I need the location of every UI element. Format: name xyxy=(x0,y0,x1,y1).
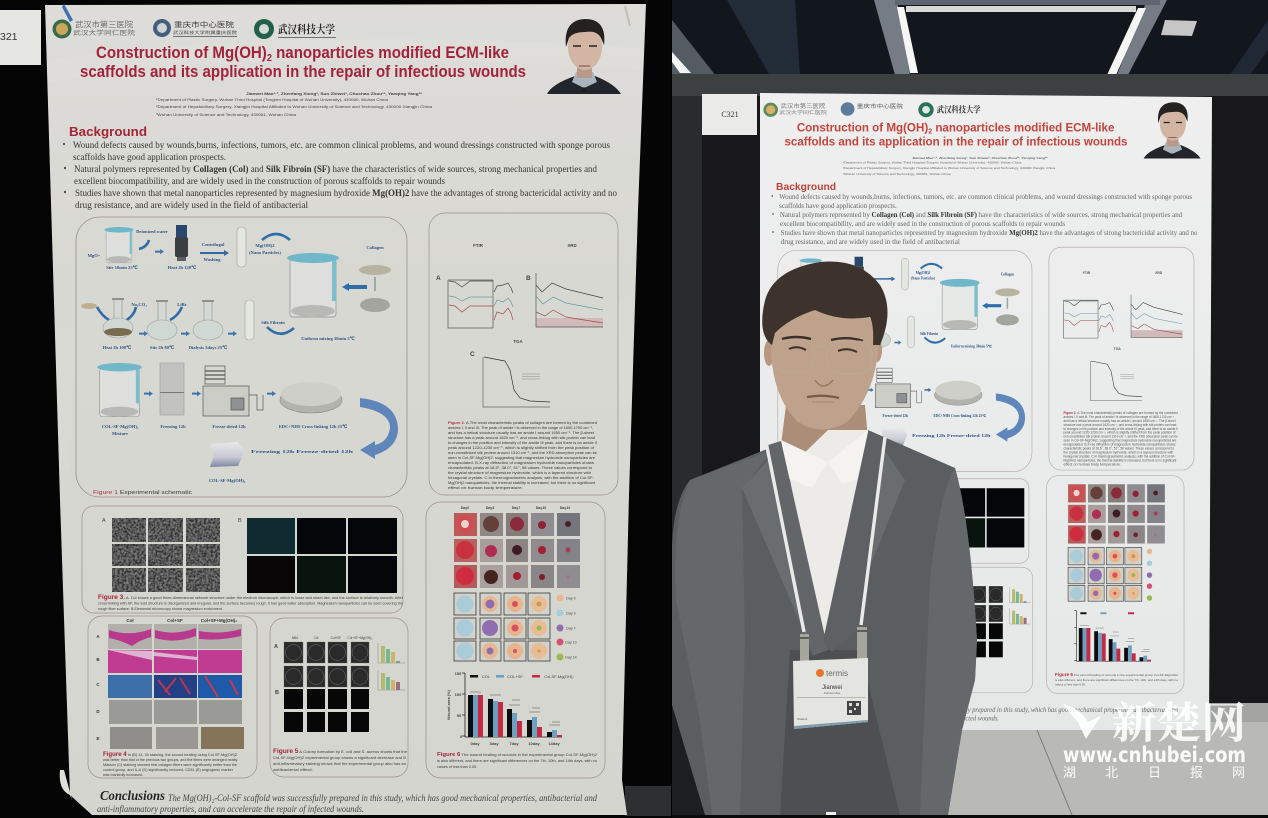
caption: figure 6: Figure 6 The wound healing of wounds in the experimental group Col-SF-Mg(OH)2 xyxy=(437,752,597,758)
schematic labels: Centrifugal xyxy=(202,242,225,247)
panel: figure 4 histology xyxy=(88,616,257,778)
title xyxy=(785,121,1128,149)
bullet list: Wound defects caused by wounds,burns, infections, tumors, etc. are common clinical problems, and wound dressings constructed with sponge porous xyxy=(73,140,610,151)
left photo: black backdrop xyxy=(0,0,671,818)
logos: 武汉科技大学 xyxy=(937,105,981,115)
figure labels: TGA xyxy=(1114,347,1121,351)
bullet list: excellent biocompatibility, and are widely used in the construction of porous scaffolds to repair wounds xyxy=(74,176,445,187)
row C: Masson xyxy=(108,675,242,698)
icon: collagen sponge and fibres xyxy=(359,265,391,312)
column and row labels: Col+SF+Mg(OH)₂ xyxy=(201,618,237,623)
caption: figure 4: Masson (C) staining showed that collagen fibers were significantly better than the xyxy=(103,763,237,767)
caption: figure 6: is also different, and there are significant differences on the 7th, 10th, and 14th days, with no xyxy=(1055,678,1178,682)
logo: Wuhan Third Hospital: 武汉大学同仁医院 xyxy=(73,29,135,37)
floor strip beside left poster xyxy=(625,786,671,816)
icon: silk cocoon xyxy=(81,303,97,309)
schematic labels: Dialysis 3days 25℃ xyxy=(189,344,228,350)
column titles and chart labels: 7day xyxy=(509,741,519,746)
watermark calligraphy: 新楚网 xyxy=(1112,700,1246,748)
caption: figure 2 xyxy=(448,420,598,490)
icon: large beaker xyxy=(287,253,339,317)
icon: freezer xyxy=(160,363,184,415)
schematic labels: Freeze-dried 12h xyxy=(212,424,246,429)
badge clips xyxy=(800,627,867,663)
column titles and chart labels: Col-SF-Mg(OH)₂ xyxy=(544,674,574,679)
icon: scaffold dish xyxy=(280,382,342,413)
caption: figure 2: encapsulated. B.X-ray diffraction of magnesium hydroxide nanoparticles shows xyxy=(448,460,594,465)
pins on poster corners xyxy=(62,4,630,26)
title: scaffolds and its application in the repair of infectious wounds xyxy=(785,135,1128,149)
caption: figure 1: Figure 1 Experimental schematic xyxy=(93,490,193,496)
column titles and chart labels: Day 3 xyxy=(566,612,576,616)
schematic labels: Na₂CO₃ xyxy=(131,302,147,307)
figure labels xyxy=(883,271,1163,438)
caption: figure 6: is also different, and there are significant differences on the 7th, 10th, and 14th days, with no xyxy=(437,759,597,763)
caption: figure 2: Figure 2. A.The most characteristic peaks of collagen are formed by the combined xyxy=(1063,411,1178,415)
labels: Col+SF+Mg(OH)₂ xyxy=(347,636,373,640)
authors: ¹Department of Plastic Surgery, Wuhan Third Hospital (Tongren Hospital of Wuhan University), 430060, Wuhan China xyxy=(843,161,1022,165)
heading: Background: Background xyxy=(69,124,147,139)
schematic labels: Deionized water xyxy=(136,229,168,234)
column titles and chart labels: 0 xyxy=(460,734,463,739)
badge logo: termis xyxy=(826,669,848,678)
caption: figure 2: characteristic peaks at 18.5°, 38.0°, 51°, 58 values. These values correspond to xyxy=(1063,446,1174,451)
bullet list: scaffolds have good application prospects. xyxy=(779,202,897,210)
right photo: poster board xyxy=(672,74,1268,756)
caption: figure 2: hexagonal crystals. C.In thermogravimetric analysis, with the addition of Col-SF- xyxy=(1063,454,1176,458)
column titles and chart labels: Wound area (%) xyxy=(446,689,451,720)
chart titles xyxy=(436,243,577,358)
watermark subtitle: 日 xyxy=(1148,765,1161,780)
column titles and chart labels: Day14 xyxy=(560,506,570,510)
figure 4 images xyxy=(802,572,907,671)
figure labels: Freeze-dried 12h xyxy=(883,414,908,418)
plate grid: staining xyxy=(284,689,369,732)
caption: figure 3: Figure 3. A. Col shows a good three-dimensional network structure under the electron microscope, which is loose and sheet-like, and the surface is relatively smooth. After xyxy=(98,595,404,601)
panel: figure 5 antibacterial xyxy=(270,618,408,777)
caption: figure 5 xyxy=(273,749,407,772)
bullet list xyxy=(771,193,1198,246)
column titles and chart labels: Day3 xyxy=(486,506,494,510)
chart titles: XRD xyxy=(567,243,577,248)
title: Construction of Mg(OH) xyxy=(797,121,940,134)
column titles and chart labels: 10day xyxy=(528,741,540,746)
chart titles: TGA xyxy=(513,339,523,344)
schematic labels: Heat 2h 100℃ xyxy=(103,344,132,350)
chart: FTIR xyxy=(448,280,513,328)
schematic labels: Silk Fibroin xyxy=(261,320,285,325)
name badge xyxy=(793,658,868,729)
logo: Chongqing Central Hospital: 武汉科技大学附属重庆医院 xyxy=(173,29,237,35)
arrow: large curved xyxy=(360,398,398,459)
right photo: ceiling xyxy=(672,0,1268,76)
figure labels: Uniform mixing 30min 5℃ xyxy=(951,344,993,349)
icon: mixture beaker xyxy=(97,363,142,417)
title: nanoparticles modified ECM-like xyxy=(272,44,509,62)
watermark subtitle: 报 xyxy=(1190,765,1203,780)
conclusions: Conclusions xyxy=(100,789,165,804)
logos: 武汉市第三医院 xyxy=(781,102,826,110)
caption: figure 2: structure has a peak around 1620 cm⁻¹, and cross-linking with silk protein can lead xyxy=(448,435,595,440)
column and row labels: B xyxy=(96,657,100,662)
schematic labels: Washing xyxy=(203,257,221,262)
logo: Chongqing Central Hospital: 重庆市中心医院 xyxy=(174,20,234,29)
hair xyxy=(762,261,888,345)
caption: figure 2: Mg(OH)2 nanoparticles, the thermal stability is increased, but there is no significant xyxy=(1063,458,1176,462)
caption: figure 4: was better than that of the previous two groups, and the fibers were arranged neatly. xyxy=(103,758,238,762)
labels: A xyxy=(274,644,278,650)
watermark subtitle: 网 xyxy=(1232,765,1245,780)
caption: figure 5: anti-inflammatory staining shows that the experimental group also has an xyxy=(273,762,406,766)
bullet list: Studies have shown that metal nanoparticles represented by magnesium hydroxide Mg(OH)2 have the advantages of strong bactericidal activity and no xyxy=(75,188,617,199)
authors and affiliations: Jianwei Mao¹·², Zhenfang Xiong¹, Sun Zhiwei³, Chuchao Zhou¹*, Yanqing Yang¹* xyxy=(246,91,423,96)
bullet list: drug resistance, and are widely used in the field of antibacterial xyxy=(75,200,308,211)
bullet list: Wound defects caused by wounds,burns, infections, tumors, etc. are common clinical problems, and wound dressings constructed with sponge porous xyxy=(779,193,1192,201)
figure labels: FTIR xyxy=(1083,271,1091,275)
bar charts xyxy=(378,643,405,690)
caption: figure 2: effect on human body temperature. xyxy=(1063,462,1121,466)
panel: figure 3 microscopy xyxy=(82,506,404,613)
eyebrows and eyes xyxy=(782,337,863,352)
column titles and chart labels: Day7 xyxy=(512,506,520,510)
schematic labels: LiBr xyxy=(177,302,187,307)
image grid: SEM xyxy=(112,518,220,592)
poster header: logos, title, authors xyxy=(52,19,526,117)
labels xyxy=(274,636,373,696)
column and row labels: D xyxy=(96,709,100,714)
schematic labels: Stir 10min 25℃ xyxy=(106,264,139,270)
schematic labels: COL-SF-Mg(OH)₂ xyxy=(209,478,246,483)
booth number card on board xyxy=(702,94,757,135)
row D: IHC xyxy=(109,700,242,724)
chart titles: A xyxy=(436,275,441,282)
column titles and chart labels: Day 0 xyxy=(566,596,576,600)
conclusions xyxy=(794,705,1178,723)
figure labels: Collagen xyxy=(1001,273,1014,277)
caption: figure 2: structure has a peak around 1620 cm⁻¹, and cross-linking with silk protein can lead xyxy=(1063,423,1177,427)
wound photos xyxy=(454,513,580,588)
caption: figure 4 xyxy=(103,752,238,777)
icon: freeze dryer xyxy=(203,366,263,416)
icon: autoclave xyxy=(175,225,188,261)
panel: figure 2 characterization xyxy=(429,213,618,495)
conclusions: anti-inflammatory properties, and can accelerate the repair of infected wounds. xyxy=(794,713,999,723)
figure 1 artwork xyxy=(782,257,1025,448)
panel letters xyxy=(102,518,242,524)
booth number card on board: C321 xyxy=(721,110,739,119)
logo: Wuhan University of Science and Technology xyxy=(254,19,336,39)
column titles and chart labels: Day 10 xyxy=(565,640,577,644)
column titles and chart labels: 3day xyxy=(489,741,499,746)
caption: figure 2: hexagonal crystals. C.In thermogravimetric analysis, with the addition of Col-SF- xyxy=(448,475,595,480)
plate grid: colony plates xyxy=(284,642,369,687)
wound trace squares xyxy=(454,593,550,661)
authors and affiliations: ²Department of Hepatobiliary Surgery, Xiangjin Hospital Affiliated to Wuhan University of Science and Technology, 430000 Xiangjin China xyxy=(156,105,433,109)
ears xyxy=(764,338,882,366)
figure labels: EDC+NHS Cross-linking 12h 25℃ xyxy=(933,413,987,418)
column titles and chart labels: Day 7 xyxy=(566,626,576,630)
panel: figure 1 experimental schematic xyxy=(76,217,407,497)
title: nanoparticles modified ECM-like xyxy=(932,121,1114,134)
cuff xyxy=(826,812,836,815)
schematic labels: Stir 2h 80℃ xyxy=(150,344,175,350)
caption: figure 2: non-crosslinked silk protein around 1310 cm⁻¹, and the XRD absorption peak can be xyxy=(448,450,598,455)
caption: figure 2: peak around 1220-1230 cm⁻¹, which is slightly shifted from the peak position of xyxy=(1063,431,1176,435)
column and row labels: C xyxy=(96,682,100,687)
background heading and bullets xyxy=(63,124,617,211)
caption: figure 2 xyxy=(1063,411,1178,466)
column titles and chart labels: 150 xyxy=(455,671,462,676)
caption: figure 6: Figure 6 The wound healing of wounds in the experimental group Col-SF-Mg(OH)2 xyxy=(1055,672,1178,677)
booth number card xyxy=(0,10,41,65)
authors xyxy=(843,156,1056,176)
column and row labels xyxy=(96,618,237,741)
icon: test tubes xyxy=(237,227,254,340)
schematic labels: EDC+NHS Cross-linking 12h 25℃ xyxy=(279,423,348,429)
booth number card: 321 xyxy=(0,31,18,43)
labels: Col+SF xyxy=(331,636,341,640)
authors: ²Department of Hepatobiliary Surgery, Xiangjin Hospital Affiliated to Wuhan University of Science and Technology, 430000 Xiangjin China xyxy=(843,166,1056,170)
glasses xyxy=(773,340,872,374)
schematic labels xyxy=(88,229,384,483)
authors: ³Wuhan University of Science and Technology, 430081, Wuhan China xyxy=(843,172,951,176)
icon: small beaker xyxy=(104,227,134,263)
caption: figure 2: seen in Col-SF-Mg(OH)2, suggesting that magnesium hydroxide nanoparticles are xyxy=(1063,439,1177,443)
caption: figure 6: values of less than 0.05. xyxy=(1055,683,1086,687)
right poster figures xyxy=(778,247,1194,723)
portrait xyxy=(1144,102,1201,158)
schematic labels: Collagen xyxy=(366,245,384,250)
name badge: Student xyxy=(797,717,808,721)
figure 2 charts xyxy=(1063,295,1183,401)
panel: figure 6 wound healing xyxy=(426,502,605,778)
heading: Background: Background xyxy=(776,182,836,193)
authors and affiliations xyxy=(156,91,433,117)
shirt and collar xyxy=(781,430,873,650)
caption: figure 3: rough fiber surface. B.Elemental microscopy shows magnesium enrichment. xyxy=(98,607,223,611)
nose and mouth xyxy=(807,380,839,402)
column and row labels: A xyxy=(96,634,100,639)
icon: process arrows xyxy=(139,249,375,396)
figure 5 images xyxy=(938,586,1030,657)
column titles and chart labels: Day10 xyxy=(536,506,546,510)
column titles and chart labels: 50 xyxy=(457,713,462,718)
logo: Wuhan Third Hospital: 武汉市第三医院 xyxy=(75,19,134,29)
caption: figure 4: was markedly increased. xyxy=(103,773,143,777)
row A: HE overview xyxy=(108,624,242,649)
authors: Jianwei Mao¹·², Zhenfang Xiong¹, Sun Zhiwei³, Chuchao Zhou¹*, Yanqing Yang¹* xyxy=(912,156,1049,160)
schematic labels: Heat 2h 120℃ xyxy=(168,264,197,270)
authors and affiliations: ³Wuhan University of Science and Technology, 430081, Wuhan China xyxy=(156,113,297,117)
bullet list xyxy=(63,140,617,211)
watermark subtitle xyxy=(1063,765,1245,780)
figure labels: Mg(OH)2 xyxy=(916,271,930,275)
bullet list: scaffolds have good application prospects. xyxy=(73,152,226,163)
bullet list: Natural polymers represented by Collagen (Col) and Silk Fibroin (SF) have the characteristics of wide sources, strong mechanical properties and xyxy=(74,164,597,175)
caption: figure 2: effect on human body temperature. xyxy=(448,485,523,490)
logo: Wuhan University of Science and Technology: 武汉科技大学 xyxy=(278,22,335,36)
person in suit with lanyard badge xyxy=(672,261,977,815)
column and row labels: Col xyxy=(126,618,134,623)
caption: figure 2: encapsulated. B.X-ray diffraction of magnesium hydroxide nanoparticles shows xyxy=(1063,443,1176,447)
bullet list: drug resistance, and are widely used in the field of antibacterial xyxy=(781,238,960,246)
caption: figure 2: characteristic peaks at 18.5°, 38.0°, 51°, 58 values. These values correspond to xyxy=(448,465,593,470)
lapels xyxy=(742,444,905,650)
watermark: cnhubei logo xyxy=(1063,700,1246,780)
row B: HE detail xyxy=(108,650,242,673)
chart titles: FTIR xyxy=(473,243,484,248)
caption: figure 6 xyxy=(437,752,597,769)
caption: figure 2: seen in Col-SF-Mg(OH)2, suggesting that magnesium hydroxide nanoparticles are xyxy=(448,455,596,460)
panel letters: A xyxy=(102,518,106,524)
conclusions: The Mg(OH)₂-Col-SF scaffold was successfully prepared in this study, which has good mechanical properties, antibacterial and xyxy=(168,793,597,804)
column titles and chart labels: 100 xyxy=(455,692,462,697)
row E: IHC xyxy=(110,727,244,749)
figure 6 images and chart xyxy=(1068,484,1165,661)
logo: Wuhan Third Hospital xyxy=(52,19,135,38)
icon: bird xyxy=(1063,704,1101,739)
conclusions: anti-inflammatory properties, and can accelerate the repair of infected wounds. xyxy=(97,804,364,815)
schematic labels: Freezing 12h xyxy=(160,424,186,429)
column titles and chart labels: 0day xyxy=(470,741,480,746)
column titles and chart labels: 14day xyxy=(548,741,560,746)
jacket xyxy=(672,430,977,815)
column titles and chart labels: COL xyxy=(482,674,491,679)
caption: figure 6 xyxy=(1055,672,1178,687)
icon: curved arrows xyxy=(97,234,294,334)
figure 3 images xyxy=(805,488,1024,547)
caption: figure 2: the crystal structure of magnesium hydroxide, which is a layered structure with xyxy=(448,470,591,475)
logo: Chongqing Central Hospital xyxy=(153,19,237,37)
right poster header xyxy=(763,102,1201,246)
column titles and chart labels: Day0 xyxy=(461,506,469,510)
title: Construction of Mg(OH) xyxy=(96,44,283,62)
caption: figure 2: and has a helical structure usually has an amide I around 1650 cm⁻¹. The β-sheet xyxy=(448,430,595,435)
caption: figure 2: the crystal structure of magnesium hydroxide, which is a layered structure with xyxy=(1063,450,1174,454)
watermark subtitle: 北 xyxy=(1105,765,1118,780)
column and row labels: E xyxy=(96,736,100,741)
figure labels: XRD xyxy=(1155,271,1163,275)
left poster sheet xyxy=(45,4,646,815)
schematic labels: Mixture xyxy=(112,431,128,436)
panel outlines xyxy=(778,247,1194,694)
caption: figure 2: amides I, II and III. The peak of amide I is observed in the range of 1600-1700 cm⁻¹, xyxy=(1063,415,1175,419)
schematic labels: Uniform mixing 30min 5℃ xyxy=(301,335,356,341)
chart titles: C xyxy=(470,351,475,358)
caption: figure 4: control group, and IL-6 (D) significantly reduced; CD31 (E) angiogenic marker xyxy=(103,768,234,772)
panel letters: B xyxy=(238,518,242,524)
caption: figure 3 xyxy=(98,595,404,611)
column and row labels: Col+SF xyxy=(167,618,183,623)
watermark subtitle: 湖 xyxy=(1063,765,1076,780)
caption: figure 5: Figure 5 A.Colony formation by E. coli and S. aureus shows that the xyxy=(273,749,407,755)
bullet list: Studies have shown that metal nanoparticles represented by magnesium hydroxide Mg(OH)2 have the advantages of strong bactericidal activity and no xyxy=(781,229,1198,237)
caption: figure 2: to changes in the position and intensity of the amide III peak, and there is an amide II xyxy=(448,440,597,445)
portrait photo in poster header xyxy=(547,19,621,94)
caption: figure 3: cross-linking with SF, the void structure is disorganized and irregular, and the surface becomes rough. It has good water absorption. Magnesium nanoparticles can be seen covering the xyxy=(98,602,403,606)
figure labels: Freezing 12h Freeze-dried 12h xyxy=(912,434,991,438)
schematic labels: Freezing 12h Freeze-dried 12h xyxy=(251,449,354,454)
bullet list: excellent biocompatibility, and are widely used in the construction of porous scaffolds to repair wounds xyxy=(780,220,1065,228)
chart: XRD xyxy=(536,273,603,327)
caption: figure 2: to changes in the position and intensity of the amide III peak, and there is an amide II xyxy=(1063,427,1178,431)
authors and affiliations: ¹Department of Plastic Surgery, Wuhan Third Hospital (Tongren Hospital of Wuhan University), 430060, Wuhan China xyxy=(156,98,389,102)
neck xyxy=(781,405,868,480)
chart: TGA xyxy=(483,357,550,407)
column titles and chart labels: Day 14 xyxy=(565,656,577,660)
caption: figure 2: Figure 2. A.The most characteristic peaks of collagen are formed by the combined xyxy=(448,420,597,425)
image grid: elemental mapping xyxy=(247,518,397,593)
column titles and chart labels: COL+SF xyxy=(507,674,523,679)
figure labels: Silk Fibroin xyxy=(920,332,938,336)
labels: NBA xyxy=(292,636,299,640)
caption: figure 5: antibacterial effect. xyxy=(273,768,313,772)
legend dots xyxy=(556,594,564,660)
bullet list: Natural polymers represented by Collagen (Col) and Silk Fibroin (SF) have the characteristics of wide sources, strong mechanical properties and xyxy=(780,211,1182,219)
icon: flasks xyxy=(103,298,223,340)
title: 2 xyxy=(928,127,932,136)
bar chart: wound area xyxy=(462,673,562,737)
logos: 武汉大学同仁医院 xyxy=(779,109,827,116)
caption: figure 2: Mg(OH)2 nanoparticles, the thermal stability is increased, but there is no significant xyxy=(448,480,596,485)
face xyxy=(771,302,879,430)
caption: figure 6: values of less than 0.05. xyxy=(437,765,477,769)
caption: figure 2: peak around 1220-1230 cm⁻¹, which is slightly shifted from the peak position of xyxy=(448,445,595,450)
caption: figure 2: non-crosslinked silk protein around 1310 cm⁻¹, and the XRD absorption peak can be xyxy=(1063,435,1178,439)
labels: Col xyxy=(314,636,319,640)
title: 2 xyxy=(267,53,272,64)
caption: figure 2: amides I, II and III. The peak of amide I is observed in the range of 1600-1700 cm⁻¹, xyxy=(448,425,593,430)
conclusions xyxy=(97,789,597,815)
floor xyxy=(672,700,1268,818)
logos: 重庆市中心医院 xyxy=(857,102,904,110)
schematic labels: (Nano Particles) xyxy=(249,250,281,255)
name badge: Jianwei Mao xyxy=(824,691,841,695)
caption: figure 2: and has a helical structure usually has an amide I around 1650 cm⁻¹. The β-sheet xyxy=(1063,419,1176,423)
column titles and chart labels xyxy=(446,506,577,746)
title: scaffolds and its application in the repair of infectious wounds xyxy=(80,63,526,81)
logos xyxy=(763,102,981,117)
lanyard straps xyxy=(766,432,885,656)
schematic labels: COL-SF-Mg(OH)₂ xyxy=(102,424,139,429)
conclusions: The Mg(OH)₂-Col-SF scaffold was successfully prepared in this study, which has good mechanical properties, antibacterial and xyxy=(848,705,1178,714)
icon: final sponge xyxy=(210,442,245,467)
schematic labels: Mg(OH)2 xyxy=(255,243,275,248)
caption: figure 5: Col-SF-Mg(OH)2 experimental group shows a significant decrease and B xyxy=(273,756,406,760)
caption: figure 4: Figure 4 In (B) 14, 3h staining, the wound healing using Col-SF-Mg(OH)2 xyxy=(103,752,237,758)
right poster sheet xyxy=(760,93,1212,730)
figure labels: (Nano Particles) xyxy=(911,277,936,281)
title xyxy=(80,44,526,81)
QR code xyxy=(847,701,861,715)
chart titles: B xyxy=(526,275,531,282)
labels: B xyxy=(275,690,279,696)
schematic labels: MgO+ xyxy=(88,253,101,258)
name badge: Jianwei xyxy=(822,685,842,691)
